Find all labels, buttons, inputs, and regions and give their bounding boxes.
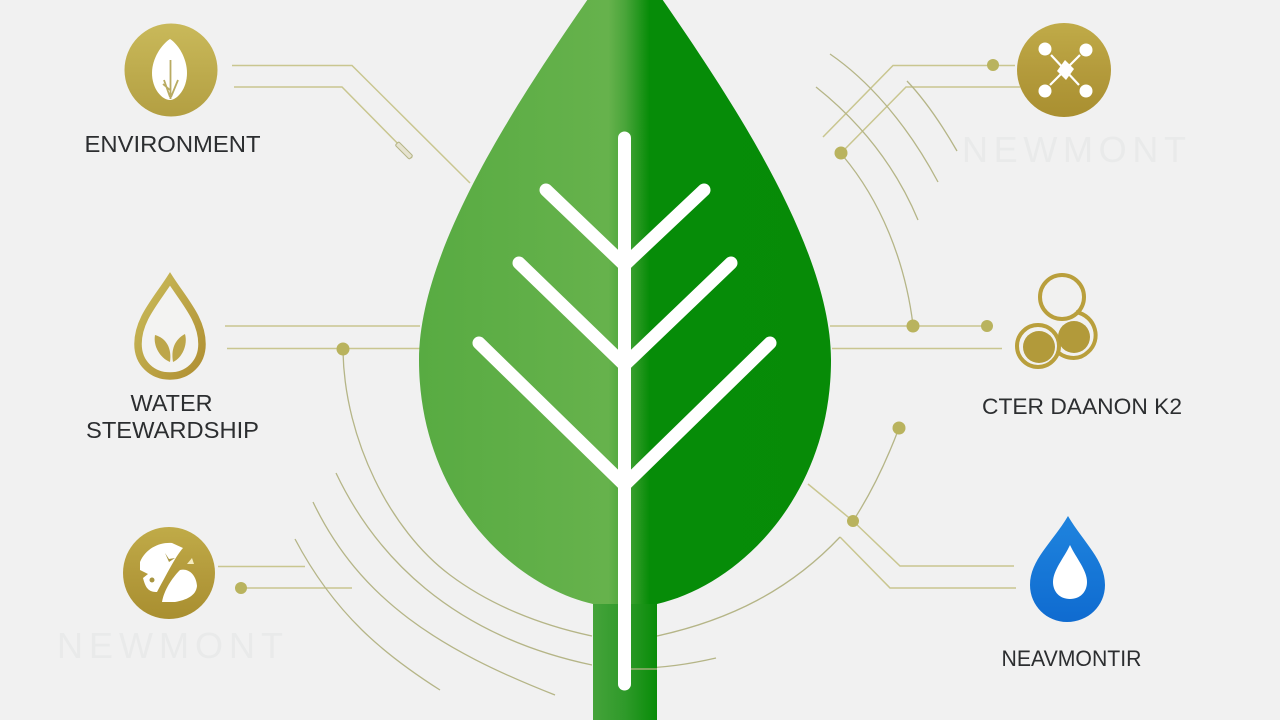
label: carbon: CTER DAANON K2	[982, 394, 1182, 419]
icon: network badge	[1017, 23, 1111, 117]
label: water stewardship: WATER	[130, 390, 212, 416]
central leaf	[419, 0, 831, 720]
connector dots	[235, 59, 999, 594]
label: environment: ENVIRONMENT	[84, 131, 260, 157]
small pill marker	[395, 142, 413, 159]
icon: linked circles	[1017, 275, 1096, 367]
watermark: right newmont: NEWMONT	[962, 129, 1186, 170]
watermark: left newmont: NEWMONT	[57, 625, 283, 666]
icon: environment leaf badge	[124, 24, 218, 116]
icon: ecosystem badge	[123, 527, 215, 619]
label: water stewardship	[86, 390, 259, 443]
icon: gold water drop	[138, 279, 202, 376]
label: newmont: NEAVMONTIR	[1002, 646, 1142, 671]
connector lines	[218, 54, 1020, 695]
leaf veins	[479, 138, 770, 684]
icon: blue water drop	[1030, 516, 1105, 622]
label: water stewardship: STEWARDSHIP	[86, 417, 259, 443]
